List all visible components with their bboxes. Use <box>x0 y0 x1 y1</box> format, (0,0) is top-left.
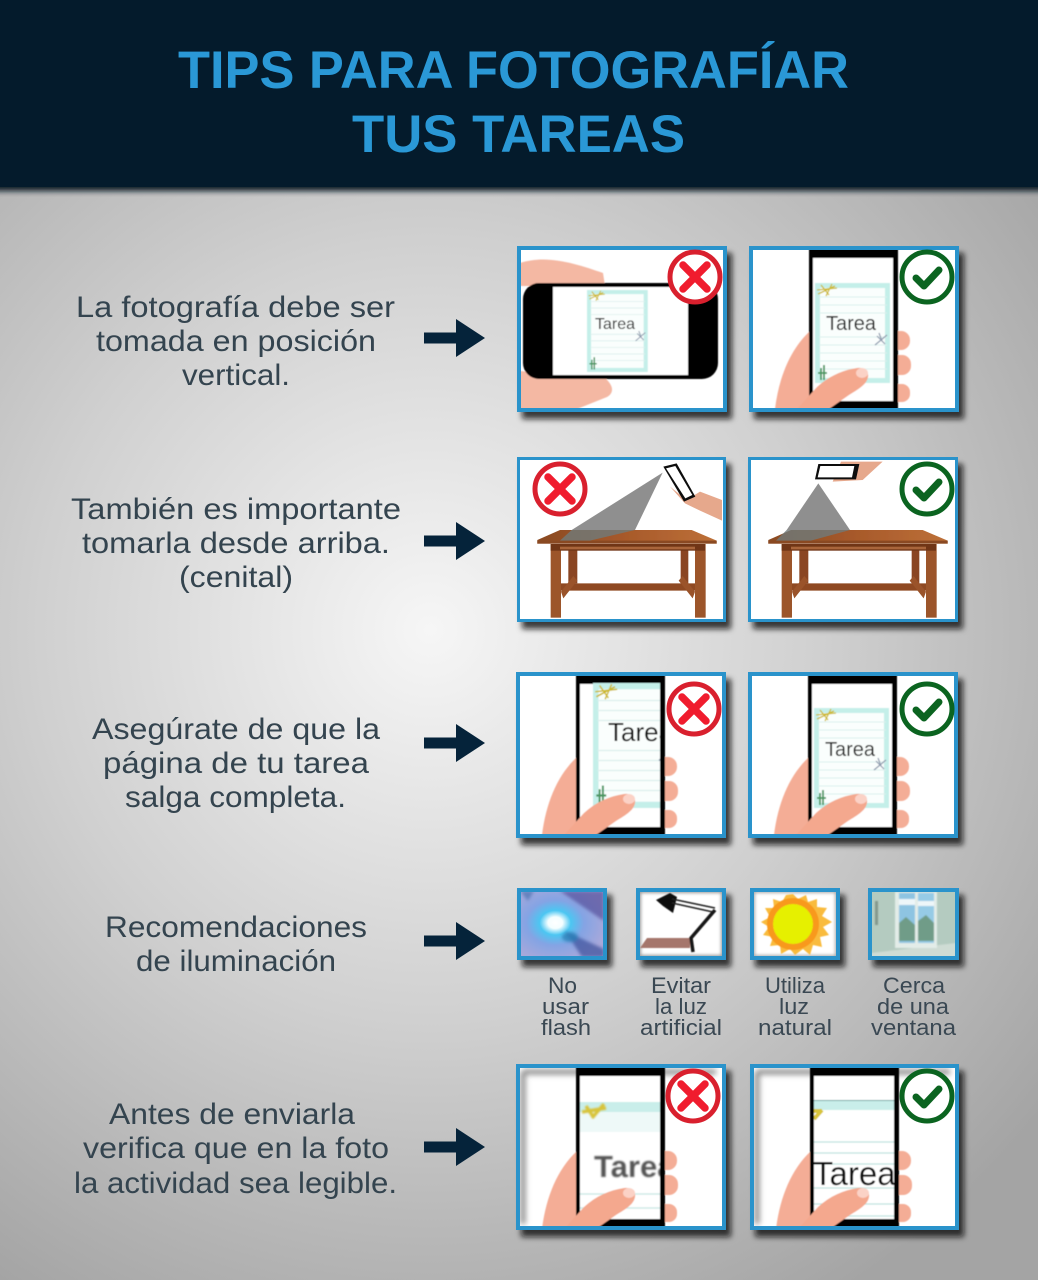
panel: whole page, correct: Tarea <box>825 739 876 761</box>
panel: vertical phone, correct <box>749 246 959 412</box>
title: TUS TAREAS <box>352 105 685 164</box>
text: lighting: de iluminación <box>136 945 336 978</box>
text: vertical position: tomada en posición <box>96 325 376 358</box>
label: natural light: Utiliza <box>765 973 826 998</box>
icon: flash <box>517 888 607 960</box>
label: flash: usar <box>542 994 589 1019</box>
panel: horizontal phone, wrong: Tarea <box>595 316 635 333</box>
arrow: row 3 <box>424 724 485 762</box>
label: natural light <box>758 973 832 1040</box>
icon: window <box>868 888 959 960</box>
text: legibility: verifica que en la foto <box>83 1132 389 1165</box>
label: flash <box>541 973 591 1040</box>
text: complete page: página de tu tarea <box>103 747 369 780</box>
arrow: row 5 <box>424 1128 485 1166</box>
label: flash: No <box>548 973 577 998</box>
panel: vertical phone, correct: Tarea <box>826 313 877 335</box>
label: near a window: Cerca <box>883 973 946 998</box>
panel: cropped page, wrong: Tarea <box>608 717 674 747</box>
header band <box>0 0 1038 191</box>
label: near a window: ventana <box>871 1015 957 1040</box>
text: from above: tomarla desde arriba. <box>82 527 390 560</box>
panel: blurry text, wrong <box>516 1064 726 1230</box>
text: lighting: Recomendaciones <box>105 911 367 944</box>
panel: cropped page, wrong <box>516 672 726 838</box>
arrow: row 1 <box>424 319 485 357</box>
label: near a window: de una <box>877 994 950 1019</box>
panel: blurry text, wrong: Tarea <box>594 1149 675 1184</box>
panel: sharp text, correct <box>750 1064 959 1230</box>
text: complete page <box>92 713 380 814</box>
panel: overhead shot, correct <box>748 457 958 622</box>
label: artificial light: Evitar <box>651 973 711 998</box>
panel: whole page, correct <box>748 672 958 838</box>
text: vertical position: vertical. <box>182 359 290 392</box>
label: natural light: luz <box>779 994 809 1019</box>
text: from above: (cenital) <box>179 561 293 594</box>
label: near a window <box>871 973 957 1040</box>
text: legibility <box>74 1098 397 1200</box>
label: artificial light <box>640 973 722 1040</box>
label: artificial light: la luz <box>655 994 707 1019</box>
arrow: row 2 <box>424 522 485 560</box>
label: artificial light: artificial <box>640 1015 722 1040</box>
text: legibility: la actividad sea legible. <box>74 1167 397 1200</box>
text: from above <box>71 493 401 594</box>
text: vertical position <box>76 291 395 392</box>
text: vertical position: La fotografía debe ser <box>76 291 395 324</box>
text: legibility: Antes de enviarla <box>109 1098 355 1131</box>
icon: desk lamp <box>636 888 726 960</box>
title: TIPS PARA FOTOGRAFÍAR <box>178 40 849 100</box>
arrow: row 4 <box>424 922 485 960</box>
icon: sun <box>750 888 840 960</box>
panel: sharp text, correct: Tarea <box>813 1155 896 1192</box>
label: flash: flash <box>541 1015 591 1040</box>
text: from above: También es importante <box>71 493 401 526</box>
text: lighting <box>105 911 367 978</box>
text: complete page: Asegúrate de que la <box>92 713 380 746</box>
panel: horizontal phone, wrong <box>517 246 727 412</box>
title <box>178 40 849 164</box>
panel: angled shot, wrong <box>517 457 726 622</box>
text: complete page: salga completa. <box>125 781 346 814</box>
label: natural light: natural <box>758 1015 832 1040</box>
